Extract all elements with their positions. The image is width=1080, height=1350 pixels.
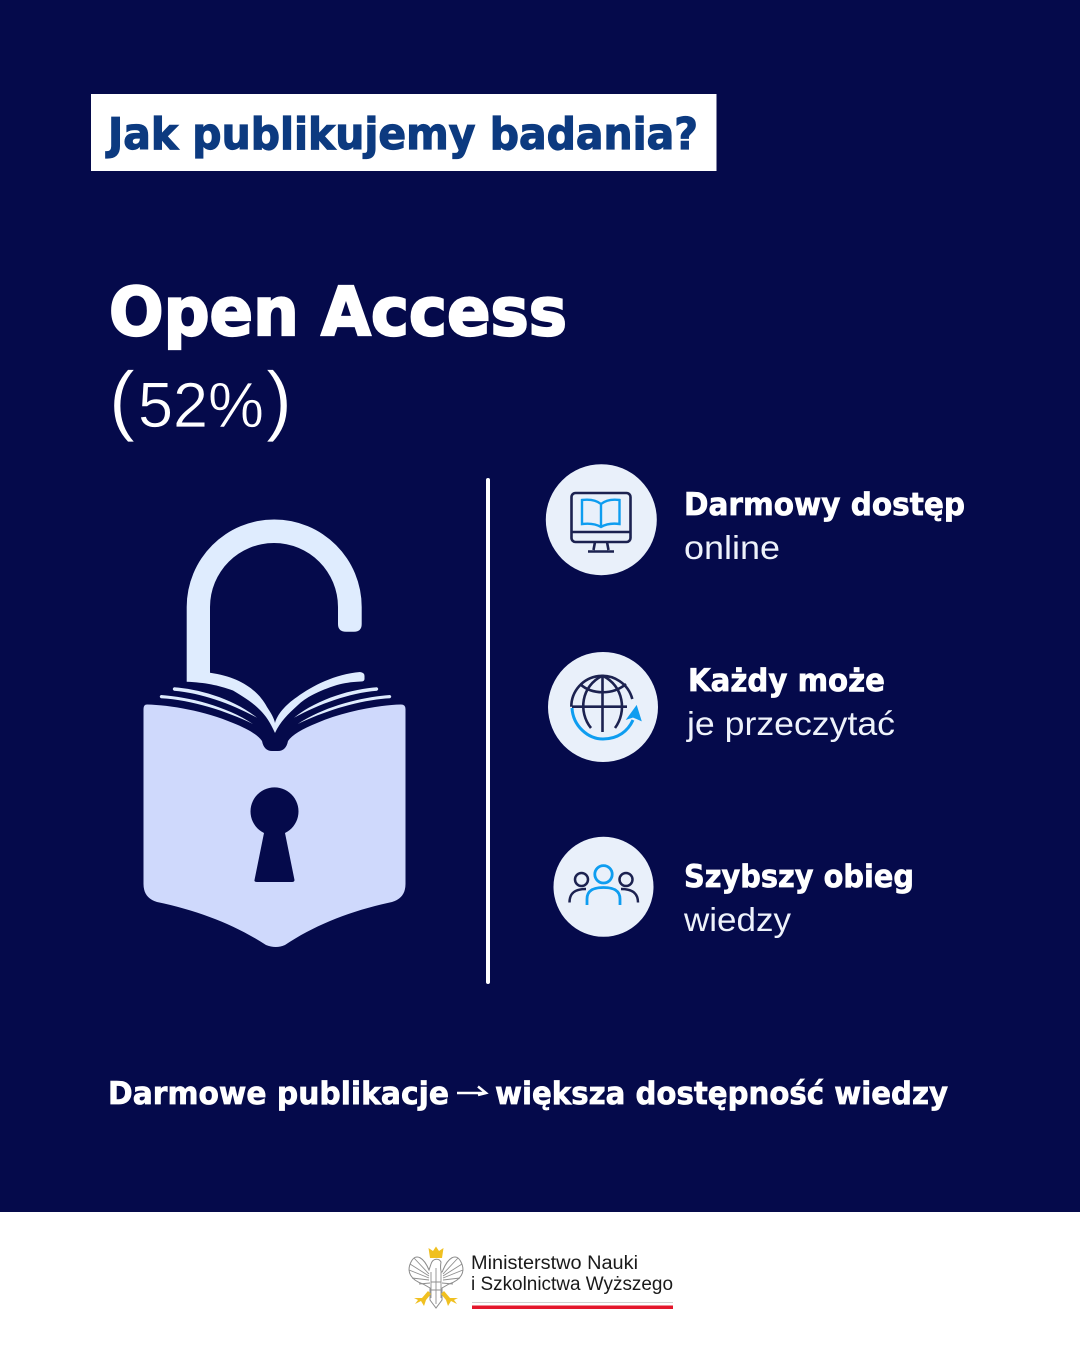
item: faster flow of knowledge: wiedzy — [683, 901, 792, 938]
icon: three people — [554, 837, 654, 937]
label: Każdy może — [688, 663, 885, 699]
arrow — [457, 1086, 486, 1095]
icon: open padlock made of a book — [144, 520, 406, 947]
item: faster flow of knowledge — [554, 837, 914, 938]
item: anyone can read — [548, 652, 895, 762]
title banner — [91, 94, 716, 171]
icon: globe with arrow — [548, 652, 658, 762]
keyhole — [250, 787, 298, 882]
label: Szybszy obieg — [684, 859, 914, 895]
vertical divider — [486, 478, 490, 984]
summary line: Darmowe publikacje — [108, 1076, 449, 1112]
logo: ministry name: Ministerstwo Nauki — [471, 1253, 638, 1274]
padlock body shaped as book cover — [144, 704, 406, 947]
heading: Open Access: Open Access — [109, 273, 567, 351]
item: free online access: online — [684, 529, 780, 566]
logo: ministry name — [471, 1253, 673, 1295]
icon: monitor with book — [546, 464, 657, 575]
item: anyone can read: je przeczytać — [686, 705, 895, 742]
label: Darmowy dostęp — [684, 487, 965, 523]
padlock shackle and open pages — [187, 520, 364, 733]
item: free online access — [546, 464, 965, 575]
summary line: większa dostępność wiedzy — [495, 1076, 948, 1112]
heading: percentage: ( — [109, 355, 135, 443]
summary line — [108, 1076, 948, 1112]
logo: eagle emblem — [409, 1246, 463, 1308]
book page edges — [160, 687, 391, 724]
heading: percentage: 52% — [138, 369, 264, 441]
title banner: Jak publikujemy badania? — [105, 109, 698, 160]
heading: percentage: ) — [266, 355, 292, 443]
footer band — [0, 1212, 1080, 1350]
logo: ministry name: i Szkolnictwa Wyższego — [471, 1274, 673, 1295]
